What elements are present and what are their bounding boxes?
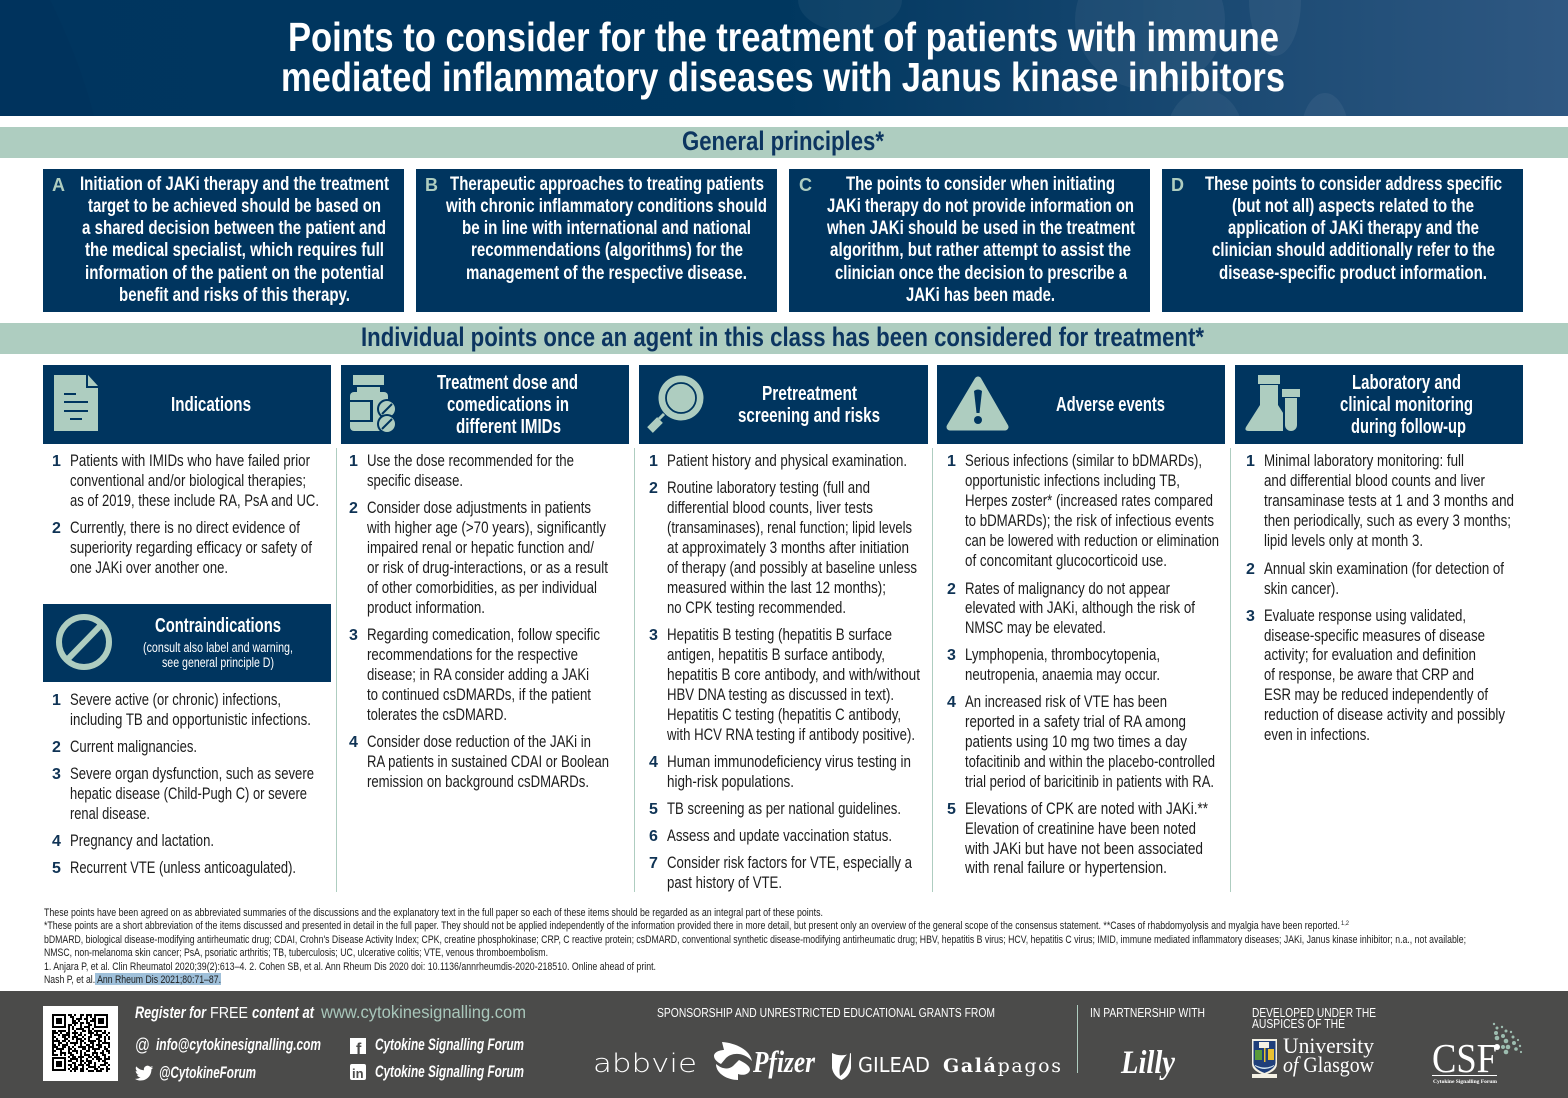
list: laboratory monitoring: 3 bbox=[1246, 608, 1255, 625]
panel: principle A: the medical specialist, which requires full bbox=[85, 240, 384, 261]
header: treatment dose bbox=[341, 365, 629, 444]
list: adverse events: Serious infections (similar to bDMARDs), bbox=[965, 451, 1202, 470]
list: pretreatment screening: antigen, hepatitis B surface antibody, bbox=[667, 645, 885, 664]
list: pretreatment screening bbox=[649, 451, 920, 892]
list: treatment dose: specific disease. bbox=[367, 471, 463, 490]
logo: University of Glasgow bbox=[1252, 1033, 1374, 1078]
list: pretreatment screening: Routine laboratory testing (full and bbox=[667, 478, 870, 497]
list: treatment dose: 4 bbox=[349, 734, 358, 751]
header: contraindications bbox=[43, 604, 331, 682]
list: adverse events: neutropenia, anaemia may occur. bbox=[965, 665, 1160, 684]
section bar: individual points bbox=[0, 322, 1568, 354]
logo: Gilead: GILEAD bbox=[858, 1053, 930, 1077]
list: treatment dose: 1 bbox=[349, 453, 358, 470]
list: contraindications: Current malignancies. bbox=[70, 737, 197, 756]
list: pretreatment screening: 2 bbox=[649, 480, 658, 497]
panel: principle A: target to be achieved should be based on bbox=[88, 196, 381, 217]
list: pretreatment screening: 5 bbox=[649, 801, 658, 818]
list: adverse events: 5 bbox=[947, 801, 956, 818]
sponsors heading: SPONSORSHIP AND UNRESTRICTED EDUCATIONAL GRANTS FROM bbox=[657, 1006, 995, 1020]
logo: University of Glasgow: of Glasgow bbox=[1283, 1052, 1374, 1077]
footer band bbox=[0, 991, 1568, 1098]
icon: prohibited sign bbox=[59, 617, 109, 667]
header: laboratory monitoring: Laboratory and bbox=[1352, 372, 1461, 394]
list: contraindications: 2 bbox=[52, 739, 61, 756]
header: contraindications: see general principle D) bbox=[162, 655, 274, 670]
panel: principle C bbox=[789, 169, 1150, 312]
list: adverse events: 4 bbox=[947, 694, 956, 711]
title bbox=[281, 14, 1285, 100]
header: pretreatment screening: screening and risks bbox=[738, 405, 880, 427]
list: laboratory monitoring: Evaluate response using validated, bbox=[1264, 606, 1466, 625]
icon: document bbox=[54, 375, 98, 431]
header: adverse events: Adverse events bbox=[1056, 394, 1165, 416]
partnership heading: IN PARTNERSHIP WITH bbox=[1090, 1006, 1205, 1020]
list: laboratory monitoring: disease-specific measures of disease bbox=[1264, 626, 1485, 645]
list: contraindications: hepatic disease (Child-Pugh C) or severe bbox=[70, 784, 307, 803]
contact: facebook bbox=[350, 1036, 524, 1058]
list: contraindications: 3 bbox=[52, 766, 61, 783]
panel: principle B: with chronic inflammatory conditions should bbox=[445, 196, 767, 217]
list: indications: as of 2019, these include RA, PsA and UC. bbox=[70, 491, 319, 510]
list: treatment dose: with higher age (>70 years), significantly bbox=[366, 518, 607, 537]
section bar: general principles: General principles* bbox=[682, 126, 884, 156]
footnotes bbox=[44, 907, 1466, 986]
list: contraindications bbox=[52, 690, 314, 877]
list: laboratory monitoring: even in infections. bbox=[1264, 725, 1370, 744]
list: treatment dose: Consider dose reduction of the JAKi in bbox=[367, 732, 591, 751]
list: adverse events: NMSC may be elevated. bbox=[965, 618, 1106, 637]
header: pretreatment screening: Pretreatment bbox=[762, 383, 857, 405]
list: contraindications: Pregnancy and lactation. bbox=[70, 831, 214, 850]
title banner bbox=[0, 0, 1568, 180]
contact: linkedin: in bbox=[352, 1066, 364, 1081]
list: adverse events: 1 bbox=[947, 453, 956, 470]
header: indications: Indications bbox=[171, 394, 251, 416]
list: pretreatment screening: at approximately 3 months after initiation bbox=[667, 538, 909, 557]
list: pretreatment screening: 4 bbox=[649, 754, 658, 771]
panel: principle A: Initiation of JAKi therapy and the treatment bbox=[80, 174, 390, 195]
panel: principle B: B bbox=[425, 175, 438, 195]
list: laboratory monitoring: reduction of disease activity and possibly bbox=[1264, 705, 1506, 724]
list: contraindications: Severe active (or chronic) infections, bbox=[70, 690, 281, 709]
logo: CSF: Cytokine Signalling Forum bbox=[1433, 1079, 1497, 1085]
panel: principle D: application of JAKi therapy and the bbox=[1228, 218, 1479, 239]
list: pretreatment screening: 6 bbox=[649, 828, 658, 845]
logo: University of Glasgow: University bbox=[1283, 1033, 1374, 1058]
panel: principle D: (but not all) aspects related to the bbox=[1232, 196, 1474, 217]
footnotes: 1,2 bbox=[1341, 921, 1350, 927]
contact: twitter: @CytokineForum bbox=[159, 1064, 256, 1082]
list: pretreatment screening: differential blood counts, liver tests bbox=[667, 498, 873, 517]
logo: Lilly: Lilly bbox=[1120, 1045, 1175, 1081]
list: pretreatment screening: TB screening as per national guidelines. bbox=[667, 799, 901, 818]
list: laboratory monitoring: ESR may be reduced independently of bbox=[1264, 685, 1488, 704]
list: pretreatment screening: Consider risk factors for VTE, especially a bbox=[667, 853, 913, 872]
panel: principle B: management of the respective disease. bbox=[466, 263, 747, 284]
list: pretreatment screening: 3 bbox=[649, 627, 658, 644]
list: pretreatment screening: Human immunodeficiency virus testing in bbox=[667, 752, 911, 771]
list: treatment dose bbox=[349, 451, 609, 791]
panel: principle D: disease-specific product information. bbox=[1219, 263, 1487, 284]
auspices heading: AUSPICES OF THE bbox=[1252, 1017, 1345, 1031]
contact: facebook: Cytokine Signalling Forum bbox=[375, 1036, 524, 1054]
title: mediated inflammatory diseases with Janus kinase inhibitors bbox=[281, 54, 1285, 100]
contact: linkedin bbox=[350, 1063, 524, 1081]
list: laboratory monitoring: then periodically, such as every 3 months; bbox=[1264, 511, 1511, 530]
logo: Pfizer: Pfizer bbox=[752, 1044, 816, 1079]
list: adverse events: Rates of malignancy do not appear bbox=[965, 579, 1170, 598]
list: laboratory monitoring: activity; for evaluation and definition bbox=[1264, 645, 1476, 664]
panel: principle C: clinician once the decision to prescribe a bbox=[835, 263, 1127, 284]
panel: principle C: The points to consider when initiating bbox=[846, 174, 1115, 195]
icon: flask and test tube bbox=[1245, 375, 1301, 431]
list: adverse events: can be lowered with reduction or elimination bbox=[965, 531, 1219, 550]
list: adverse events: trial period of baricitinib in patients with RA. bbox=[965, 772, 1214, 791]
panel: principle A: a shared decision between the patient and bbox=[82, 218, 386, 239]
header: treatment dose: different IMIDs bbox=[456, 416, 561, 438]
logo: Gilead bbox=[832, 1052, 930, 1080]
icon: warning triangle bbox=[950, 380, 1005, 427]
panel: principle C: algorithm, but rather attempt to assist the bbox=[830, 240, 1131, 261]
list: adverse events: elevated with JAKi, although the risk of bbox=[965, 598, 1195, 617]
header: laboratory monitoring: clinical monitoring bbox=[1340, 394, 1473, 416]
section bar: general principles bbox=[0, 126, 1568, 158]
list: pretreatment screening: of therapy (and possibly at baseline unless bbox=[667, 558, 917, 577]
list: pretreatment screening: 7 bbox=[649, 855, 658, 872]
panel: principle A bbox=[43, 169, 404, 312]
contact: linkedin: Cytokine Signalling Forum bbox=[375, 1063, 524, 1081]
list: treatment dose: Consider dose adjustments in patients bbox=[367, 498, 591, 517]
panel: principle B: recommendations (algorithms) for the bbox=[471, 240, 743, 261]
list: treatment dose: product information. bbox=[367, 598, 485, 617]
list: adverse events: 3 bbox=[947, 647, 956, 664]
panel: principle A: A bbox=[52, 175, 65, 195]
list: pretreatment screening: no CPK testing recommended. bbox=[667, 598, 846, 617]
logo: CSF: CSF bbox=[1432, 1035, 1497, 1081]
register line: FREE bbox=[210, 1005, 248, 1022]
list: pretreatment screening: (transaminases), renal function; lipid levels bbox=[667, 518, 912, 537]
list: contraindications: 4 bbox=[52, 833, 61, 850]
list: adverse events: opportunistic infections including TB, bbox=[965, 471, 1180, 490]
logo: CSF bbox=[1432, 1023, 1522, 1085]
list: adverse events: to bDMARDs); the risk of infectious events bbox=[965, 511, 1214, 530]
list: adverse events: An increased risk of VTE has been bbox=[965, 692, 1167, 711]
list: laboratory monitoring: skin cancer). bbox=[1264, 579, 1339, 598]
list: adverse events bbox=[947, 451, 1219, 877]
list: pretreatment screening: hepatitis B core antibody, and with/without bbox=[667, 665, 920, 684]
list: treatment dose: Regarding comedication, follow specific bbox=[367, 625, 600, 644]
list: laboratory monitoring: Minimal laboratory monitoring: full bbox=[1264, 451, 1464, 470]
list: pretreatment screening: Assess and update vaccination status. bbox=[667, 826, 892, 845]
panel: principle C: JAKi therapy do not provide information on bbox=[827, 196, 1134, 217]
list: contraindications: including TB and opportunistic infections. bbox=[70, 710, 311, 729]
list: treatment dose: of other comorbidities, as per individual bbox=[367, 578, 597, 597]
list: pretreatment screening: with HCV RNA testing if antibody positive). bbox=[666, 725, 915, 744]
footnotes: These points have been agreed on as abbreviated summaries of the discussions and the explanatory text in the full paper so each of these items should be regarded as an integral part of these points. bbox=[44, 907, 823, 919]
list: treatment dose: RA patients in sustained CDAI or Boolean bbox=[367, 752, 609, 771]
header: laboratory monitoring: during follow-up bbox=[1351, 416, 1466, 438]
contact: email bbox=[135, 1035, 321, 1055]
list: treatment dose: to continued csDMARDs, if the patient bbox=[367, 685, 591, 704]
panel: principle A: information of the patient on the potential bbox=[85, 263, 384, 284]
list: adverse events: of concomitant glucocorticoid use. bbox=[965, 551, 1167, 570]
contact: twitter bbox=[135, 1064, 256, 1082]
header: adverse events bbox=[937, 365, 1225, 444]
contact: email: @ bbox=[135, 1035, 150, 1055]
list: pretreatment screening: Hepatitis B testing (hepatitis B surface bbox=[667, 625, 892, 644]
icon: magnifying glass bbox=[650, 376, 704, 430]
list: contraindications: Recurrent VTE (unless anticoagulated). bbox=[70, 858, 296, 877]
panel: principle D: clinician should additionally refer to the bbox=[1212, 240, 1495, 261]
section bar: individual points: Individual points once an agent in this class has been considered for treatment* bbox=[361, 322, 1204, 352]
panel: principle A: benefit and risks of this therapy. bbox=[119, 285, 350, 306]
list: adverse events: Lymphopenia, thrombocytopenia, bbox=[965, 645, 1160, 664]
list: pretreatment screening: past history of VTE. bbox=[667, 873, 782, 892]
list: laboratory monitoring: of response, be aware that CRP and bbox=[1264, 665, 1474, 684]
list: laboratory monitoring: Annual skin examination (for detection of bbox=[1264, 559, 1504, 578]
list: indications: one JAKi over another one. bbox=[70, 558, 228, 577]
header: contraindications: Contraindications bbox=[155, 615, 281, 637]
list: pretreatment screening: Patient history and physical examination. bbox=[667, 451, 907, 470]
panel: principle B: be in line with international and national bbox=[462, 218, 751, 239]
list: treatment dose: impaired renal or hepatic function and/ bbox=[367, 538, 594, 557]
panel: principle D: D bbox=[1171, 175, 1184, 195]
list: adverse events: with renal failure or hypertension. bbox=[964, 858, 1167, 877]
header: pretreatment screening bbox=[639, 365, 928, 444]
list: laboratory monitoring: 2 bbox=[1246, 561, 1255, 578]
panel: principle B bbox=[416, 169, 777, 312]
list: indications: Currently, there is no direct evidence of bbox=[70, 518, 300, 537]
header: laboratory monitoring bbox=[1235, 365, 1523, 444]
list: adverse events: Herpes zoster* (increased rates compared bbox=[965, 491, 1213, 510]
list: treatment dose: Use the dose recommended for the bbox=[367, 451, 574, 470]
list: laboratory monitoring: 1 bbox=[1246, 453, 1255, 470]
auspices heading bbox=[1252, 1006, 1376, 1031]
panel: principle D bbox=[1162, 169, 1523, 312]
contact: email: info@cytokinesignalling.com bbox=[156, 1036, 321, 1054]
footnotes: 1. Anjara P, et al. Clin Rheumatol 2020;39(2):613–4. 2. Cohen SB, et al. Ann Rheum Dis 2020 doi: 10.1136/annrheumdis-2020-218510. Online ahead of print. bbox=[44, 961, 656, 973]
list: treatment dose: tolerates the csDMARD. bbox=[367, 705, 507, 724]
panel: principle C: when JAKi should be used in the treatment bbox=[826, 218, 1136, 239]
list: adverse events: patients using 10 mg two times a day bbox=[965, 732, 1188, 751]
panel: principle C: C bbox=[799, 175, 812, 195]
list: adverse events: with JAKi but have not been associated bbox=[964, 839, 1203, 858]
panel: principle B: Therapeutic approaches to treating patients bbox=[450, 174, 764, 195]
logo: Galapagos: Galápagos bbox=[943, 1055, 1061, 1077]
header: treatment dose: Treatment dose and bbox=[437, 372, 578, 394]
list: indications: Patients with IMIDs who have failed prior bbox=[70, 451, 310, 470]
register line: www.cytokinesignalling.com bbox=[320, 1002, 526, 1022]
list: pretreatment screening: HBV DNA testing as discussed in text). bbox=[667, 685, 894, 704]
list: adverse events: Elevation of creatinine have been noted bbox=[965, 819, 1196, 838]
register line bbox=[135, 1002, 526, 1022]
list: adverse events: 2 bbox=[947, 581, 956, 598]
list: laboratory monitoring: and differential blood counts and liver bbox=[1264, 471, 1485, 490]
list: pretreatment screening: Hepatitis C testing (hepatitis C antibody, bbox=[667, 705, 901, 724]
list: indications: 1 bbox=[52, 453, 61, 470]
logo: abbvie: abbvie bbox=[593, 1049, 697, 1079]
list: contraindications: Severe organ dysfunction, such as severe bbox=[70, 764, 314, 783]
footnotes: NMSC, non-melanoma skin cancer; PsA, psoriatic arthritis; TB, tuberculosis; UC, ulcerative colitis; VTE, venous thromboembolism. bbox=[44, 947, 548, 959]
list: pretreatment screening: 1 bbox=[649, 453, 658, 470]
auspices heading: DEVELOPED UNDER THE bbox=[1252, 1006, 1376, 1020]
list: treatment dose: disease; in RA consider adding a JAKi bbox=[367, 665, 589, 684]
list: contraindications: 5 bbox=[52, 860, 61, 877]
list: indications bbox=[52, 451, 319, 577]
list: pretreatment screening: measured within the last 12 months); bbox=[667, 578, 886, 597]
list: indications: 2 bbox=[52, 520, 61, 537]
header: treatment dose: comedications in bbox=[447, 394, 569, 416]
header: indications bbox=[43, 365, 331, 444]
list: treatment dose: 3 bbox=[349, 627, 358, 644]
list: laboratory monitoring: transaminase tests at 1 and 3 months and bbox=[1264, 491, 1514, 510]
list: treatment dose: 2 bbox=[349, 500, 358, 517]
contact: facebook: f bbox=[356, 1041, 362, 1058]
register line: content at bbox=[252, 1004, 315, 1022]
register line: Register for bbox=[135, 1004, 207, 1022]
list: treatment dose: recommendations for the respective bbox=[367, 645, 578, 664]
list: contraindications: 1 bbox=[52, 692, 61, 709]
list: indications: conventional and/or biological therapies; bbox=[70, 471, 306, 490]
list: adverse events: reported in a safety trial of RA among bbox=[965, 712, 1186, 731]
list: pretreatment screening: high-risk populations. bbox=[667, 772, 794, 791]
icon: pill bottle bbox=[350, 375, 397, 434]
header: contraindications: (consult also label and warning, bbox=[143, 640, 293, 655]
list: adverse events: Elevations of CPK are noted with JAKi.** bbox=[965, 799, 1208, 818]
list: laboratory monitoring: lipid levels only at month 3. bbox=[1264, 531, 1423, 550]
QR code bbox=[43, 1006, 118, 1081]
list: treatment dose: remission on background csDMARDs. bbox=[367, 772, 589, 791]
list: treatment dose: or risk of drug-interactions, or as a result bbox=[367, 558, 608, 577]
list: adverse events: tofacitinib and within the placebo-controlled bbox=[965, 752, 1215, 771]
logo: Pfizer bbox=[714, 1042, 816, 1080]
panel: principle C: JAKi has been made. bbox=[906, 285, 1055, 306]
footnotes: Nash P, et al. Ann Rheum Dis 2021;80:71–87. bbox=[44, 974, 221, 986]
title: Points to consider for the treatment of patients with immune bbox=[288, 14, 1279, 60]
list: indications: superiority regarding efficacy or safety of bbox=[70, 538, 312, 557]
list: laboratory monitoring bbox=[1246, 451, 1514, 744]
list: contraindications: renal disease. bbox=[70, 804, 150, 823]
